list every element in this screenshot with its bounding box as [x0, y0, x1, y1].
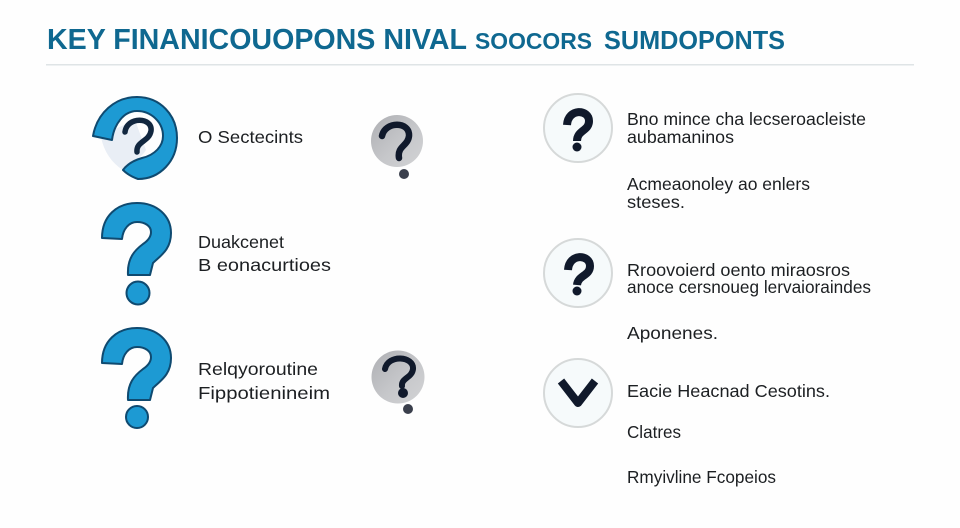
title: KEY FINANICOUOPONS NIVAL — [47, 24, 467, 56]
icon: circled check bottom right — [544, 359, 612, 427]
text block: right two: anoce cersnoueg lervaioraindes — [627, 277, 871, 297]
label: dualcenet: Duakcenet — [198, 232, 284, 252]
title — [47, 24, 785, 56]
text block: right three: Rmyivline Fcopeios — [627, 467, 776, 487]
text block: right one: aubamaninos — [627, 127, 734, 147]
icon: grey question badge top — [371, 115, 423, 179]
text block: right two — [627, 260, 871, 343]
title: SUMDOPONTS — [604, 25, 785, 55]
icon: circled question top right — [544, 94, 612, 162]
text block: right three — [627, 381, 830, 487]
label: dualcenet — [198, 232, 331, 275]
label: dualcenet: B eonacurtioes — [198, 255, 331, 275]
text block: right one: Acmeaonoley ao enlers — [627, 174, 810, 194]
text block: right three: Clatres — [627, 422, 681, 442]
text block: right two: Aponenes. — [627, 323, 718, 343]
title: SOOCORS — [475, 28, 592, 54]
icon: grey question badge bottom — [372, 350, 424, 414]
text block: right two: Rroovoierd oento miraosros — [627, 260, 850, 280]
text block: right one: Bno mince cha lecseroacleiste — [627, 109, 866, 129]
label: relqyoroutine: Relqyoroutine — [198, 359, 318, 379]
icon: large blue question mark bottom — [102, 328, 171, 428]
icon: circled question middle right — [544, 239, 612, 307]
text block: right one — [627, 109, 866, 212]
label: relqyoroutine: Fippotienineim — [198, 383, 330, 403]
icon: blue ring with question mark — [93, 97, 177, 179]
icon: large blue question mark middle — [102, 203, 171, 304]
label: sections: O Sectecints — [198, 127, 303, 147]
label: relqyoroutine — [198, 359, 330, 403]
text block: right three: Eacie Heacnad Cesotins. — [627, 381, 830, 401]
text block: right one: steses. — [627, 192, 685, 212]
